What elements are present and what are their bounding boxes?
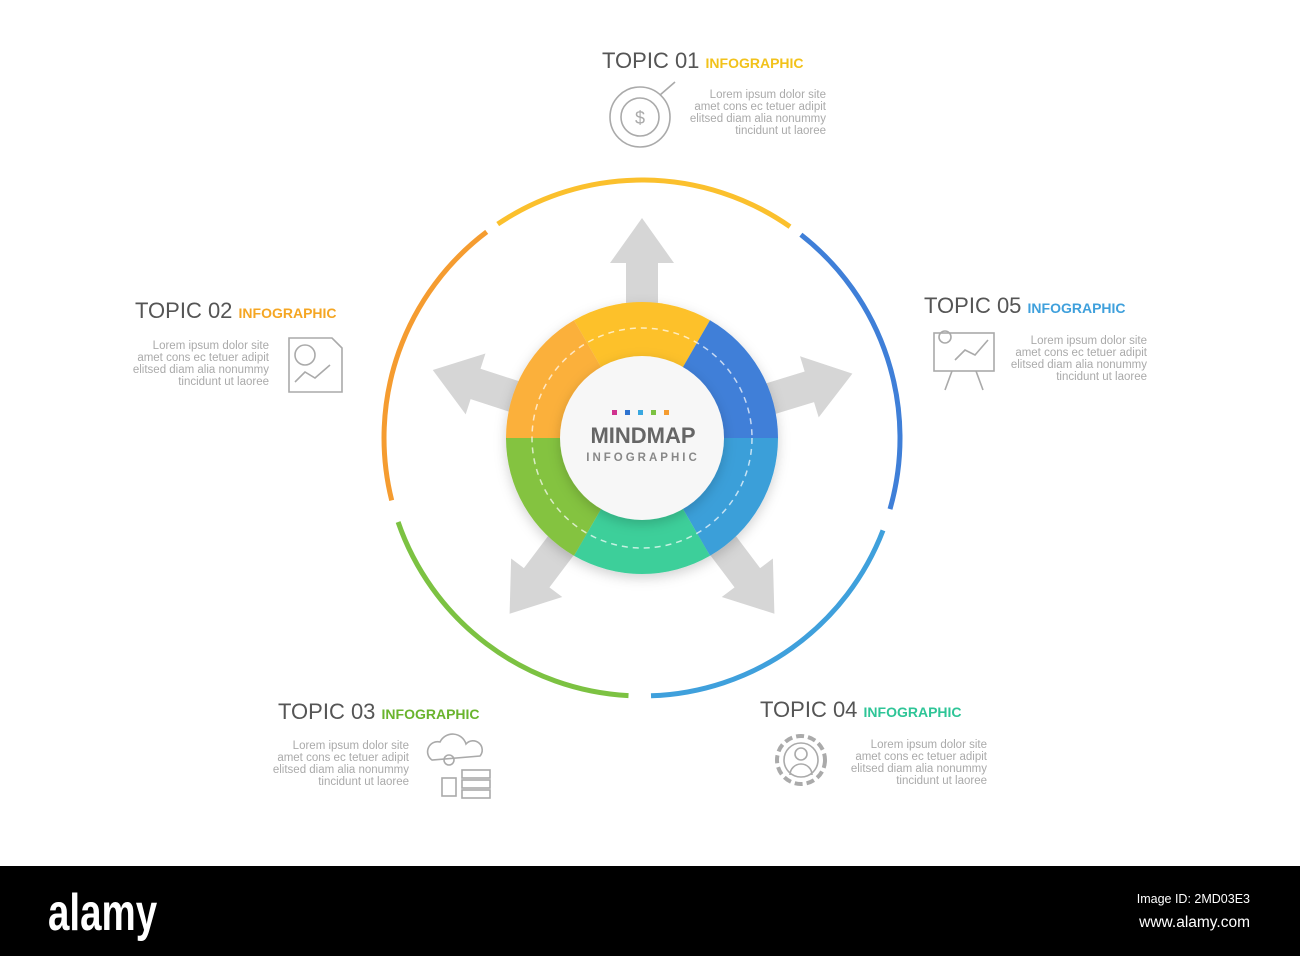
footer bar: www.alamy.com — [1138, 914, 1250, 931]
topic 04: amet cons ec tetuer adipit — [855, 751, 988, 763]
footer bar: alamy — [48, 883, 158, 941]
center squares — [612, 410, 669, 415]
topic 05: TOPIC 05 INFOGRAPHIC — [924, 293, 1126, 318]
topic 01: amet cons ec tetuer adipit — [694, 101, 827, 113]
topic 01: $ — [635, 108, 645, 128]
center donut — [506, 302, 778, 574]
topic 03: elitsed diam alia nonummy — [273, 764, 409, 776]
topic 05 — [924, 293, 1148, 390]
topic 04: elitsed diam alia nonummy — [851, 763, 987, 775]
topic 01: elitsed diam alia nonummy — [690, 113, 826, 125]
topic 03: TOPIC 03 INFOGRAPHIC — [278, 699, 480, 724]
topic 03: amet cons ec tetuer adipit — [277, 752, 410, 764]
topic 03: Lorem ipsum dolor site — [293, 740, 409, 752]
topic 02: amet cons ec tetuer adipit — [137, 352, 270, 364]
topic 01: Lorem ipsum dolor site — [710, 89, 826, 101]
outer ring — [384, 180, 900, 696]
topic 05: amet cons ec tetuer adipit — [1015, 347, 1148, 359]
topic 05: elitsed diam alia nonummy — [1011, 359, 1147, 371]
topic 02: TOPIC 02 INFOGRAPHIC — [135, 298, 337, 323]
topic 02: tincidunt ut laoree — [178, 376, 269, 388]
topic 04: Lorem ipsum dolor site — [871, 739, 987, 751]
topic 04: tincidunt ut laoree — [896, 775, 987, 787]
topic 02 — [133, 298, 342, 392]
footer bar — [0, 866, 1300, 956]
arrows — [423, 218, 862, 633]
topic 03: tincidunt ut laoree — [318, 776, 409, 788]
footer bar: Image ID: 2MD03E3 — [1137, 892, 1250, 906]
topic 03 — [273, 699, 490, 798]
topic 05: tincidunt ut laoree — [1056, 371, 1147, 383]
topic 02: Lorem ipsum dolor site — [153, 340, 269, 352]
topic 04: TOPIC 04 INFOGRAPHIC — [760, 697, 962, 722]
topic 02: elitsed diam alia nonummy — [133, 364, 269, 376]
topic 01: tincidunt ut laoree — [735, 125, 826, 137]
topic 01 — [602, 48, 827, 147]
topic 04 — [760, 697, 988, 787]
topic 01: TOPIC 01 INFOGRAPHIC — [602, 48, 804, 73]
center donut: INFOGRAPHIC — [586, 452, 700, 464]
center title: MINDMAP — [590, 423, 696, 448]
topic 05: Lorem ipsum dolor site — [1031, 335, 1147, 347]
